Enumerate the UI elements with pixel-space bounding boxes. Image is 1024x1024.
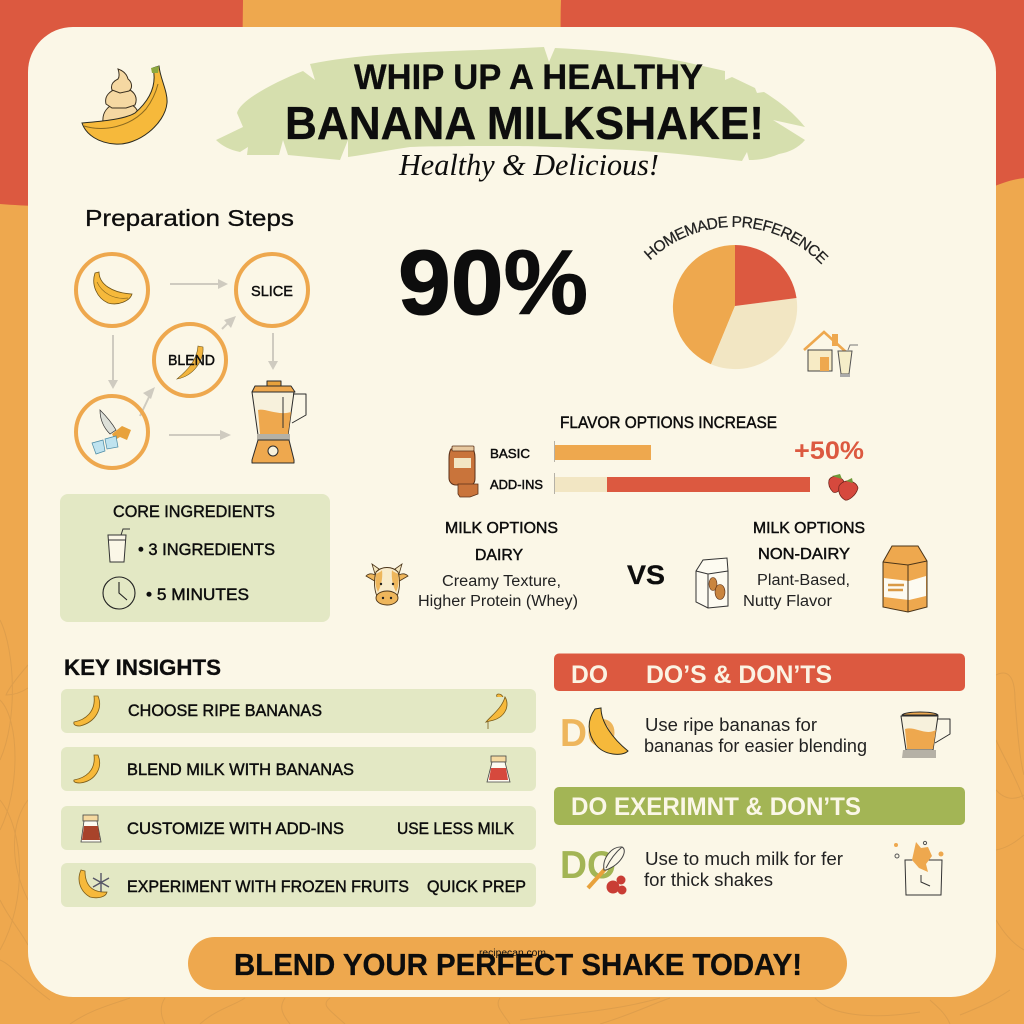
non-dairy description [743,572,850,610]
heading: preparation steps: Preparation Steps [85,205,294,231]
title: WHIP UP A HEALTHY [354,58,703,97]
insight row 2: BLEND MILK WITH BANANAS [127,761,354,779]
pie chart: homemade preference [644,216,858,377]
insight row 3: CUSTOMIZE WITH ADD-INS [127,820,344,838]
comparison: dairy [366,520,578,610]
vs label: VS [627,560,665,590]
insight row 3 [61,806,536,850]
title: BANANA MILKSHAKE! [285,97,764,149]
step: slice [236,254,308,326]
do text: Use ripe bananas for [645,715,817,735]
title [285,58,764,149]
do text: bananas for easier blending [644,736,867,756]
bar: add-ins [554,473,810,494]
icon: jars [449,446,478,497]
chart heading: FLAVOR OPTIONS INCREASE [560,414,777,432]
arrows [108,279,278,440]
flow diagram: preparation steps [76,254,308,468]
icon: do with whisk: DO [560,844,616,887]
bar: basic [554,441,651,462]
icon: ice cream swirl and banana [82,66,167,144]
bar label: add-ins: ADD-INS [490,478,543,492]
don't text: Use to much milk for fer [645,849,843,869]
increase value: +50% [794,437,864,465]
icon: milk glass [108,529,130,562]
don't text [644,849,843,890]
non-dairy description: Plant-Based, [757,572,850,589]
insight row 1: CHOOSE RIPE BANANAS [128,702,322,720]
icon: strawberries [829,474,858,500]
insight row 3: USE LESS MILK [397,820,514,838]
insight row 4: QUICK PREP [427,878,526,896]
non-dairy label: NON-DAIRY [758,546,850,563]
comparison: non-dairy [696,520,927,612]
icon: almond carton [696,558,728,608]
dairy description [418,573,578,610]
bar label: basic: BASIC [490,447,530,461]
list: key insights [61,689,536,907]
icon: do with banana: DO [560,712,616,755]
icon: cow [366,564,408,605]
do text [644,715,867,756]
green header bar [554,787,965,825]
call to action button: BLEND YOUR PERFECT SHAKE TODAY! [234,947,802,982]
panel: do's and don'ts [554,654,965,895]
step: blend: BLEND [168,352,215,369]
icon: clock [103,577,135,609]
non-dairy heading: MILK OPTIONS [753,520,865,537]
dairy label: DAIRY [475,547,523,564]
call to action button [188,937,847,990]
curved label: HOMEMADE PREFERENCE [644,216,829,264]
panel: core ingredients [60,494,330,622]
big stat: 90% [398,232,588,334]
panel heading: CORE INGREDIENTS [113,502,275,521]
icon: house and milkshake [804,332,858,377]
step: knife and ice [76,396,148,468]
icon: overflowing blender splash [894,841,944,895]
ingredients count: • 3 INGREDIENTS [138,540,275,559]
step: slice: SLICE [251,283,293,300]
don't text: for thick shakes [644,870,773,890]
red header bar [554,654,965,691]
non-dairy description: Nutty Flavor [743,593,832,610]
insight row 4 [61,863,536,907]
green header bar: DO EXERIMNT & DON’TS [571,793,861,821]
watermark: recipecan.com [479,948,546,959]
dairy description: Creamy Texture, [442,573,561,590]
bar chart: flavor options increase [449,414,864,500]
insight row 1 [61,689,536,733]
dairy heading: MILK OPTIONS [445,520,558,537]
banana leaf title backdrop [216,47,805,161]
time: • 5 MINUTES [146,585,249,604]
dairy description: Higher Protein (Whey) [418,593,578,610]
icon: blender jug [901,712,950,758]
insight row 2 [61,747,536,791]
red header bar: DO [571,661,608,689]
subtitle: Healthy & Delicious! [398,147,659,182]
icon: orange milk carton [883,546,927,612]
red header bar: DO’S & DON’TS [646,661,832,689]
pie slices [673,245,797,369]
icon: blender [252,381,306,463]
step: banana [76,254,148,326]
step: blend [154,324,226,396]
heading: key insights: KEY INSIGHTS [64,655,221,680]
insight row 4: EXPERIMENT WITH FROZEN FRUITS [127,878,409,896]
